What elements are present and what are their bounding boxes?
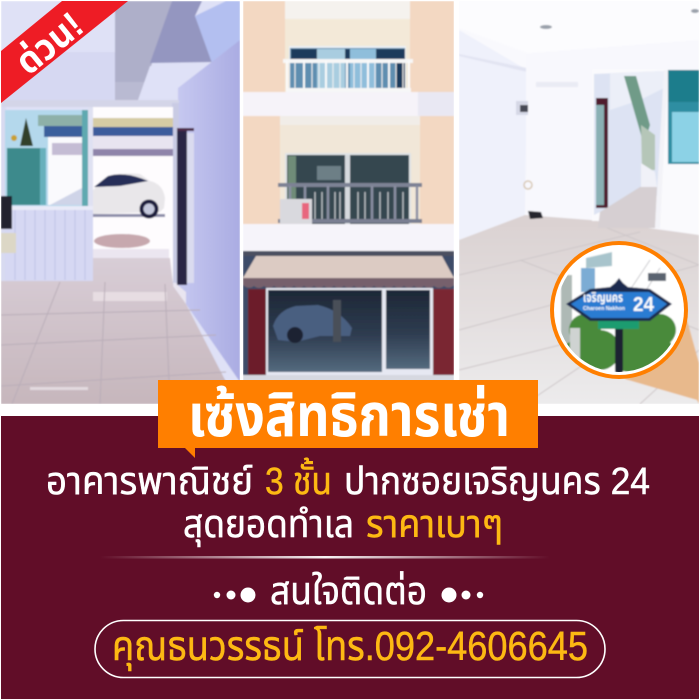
doorway [592,220,594,222]
left window [5,110,88,206]
street sign inset circle: 24 [633,294,655,316]
floor [1,258,240,404]
car [93,173,165,214]
property description line: อาคารพาณิชย์ [46,461,253,503]
photo: empty ground floor room [459,1,699,404]
side window [667,100,699,165]
orange headline tag [158,380,538,458]
tv and cabinet [1,196,12,229]
contact heading with dots: สนใจติดต่อ [270,571,427,613]
maroon information panel [1,416,699,699]
red corner ribbon [1,1,128,103]
selling point line: สุดยอดทำเล [183,504,354,547]
selling point line [183,504,503,547]
headline: เซ้งสิทธิการเช่า [188,382,510,449]
selling point line: ราคาเบาๆ [366,504,503,546]
street sign inset circle [550,241,688,379]
orange reflected wedge [625,320,699,404]
property description line [46,457,650,503]
contact name and phone: คุณธนวรรธน์ โทร.092-4606645 [112,623,588,671]
contact heading with dots [214,571,483,613]
ribbon text: ด่วน! [8,4,91,83]
door panel [88,107,93,282]
property description line: 3 ชั้น [265,457,332,503]
property description line: ปากซอยเจริญนคร 24 [344,461,650,503]
sign text: เจริญนคร [583,290,623,305]
contact pill [95,620,605,678]
door opening [93,107,173,282]
photo: three-storey building facade [243,1,454,405]
photo: interior with car outside [1,1,240,404]
street sign inset circle: Charoen Nakhon [583,306,626,312]
dark side door [177,130,187,285]
